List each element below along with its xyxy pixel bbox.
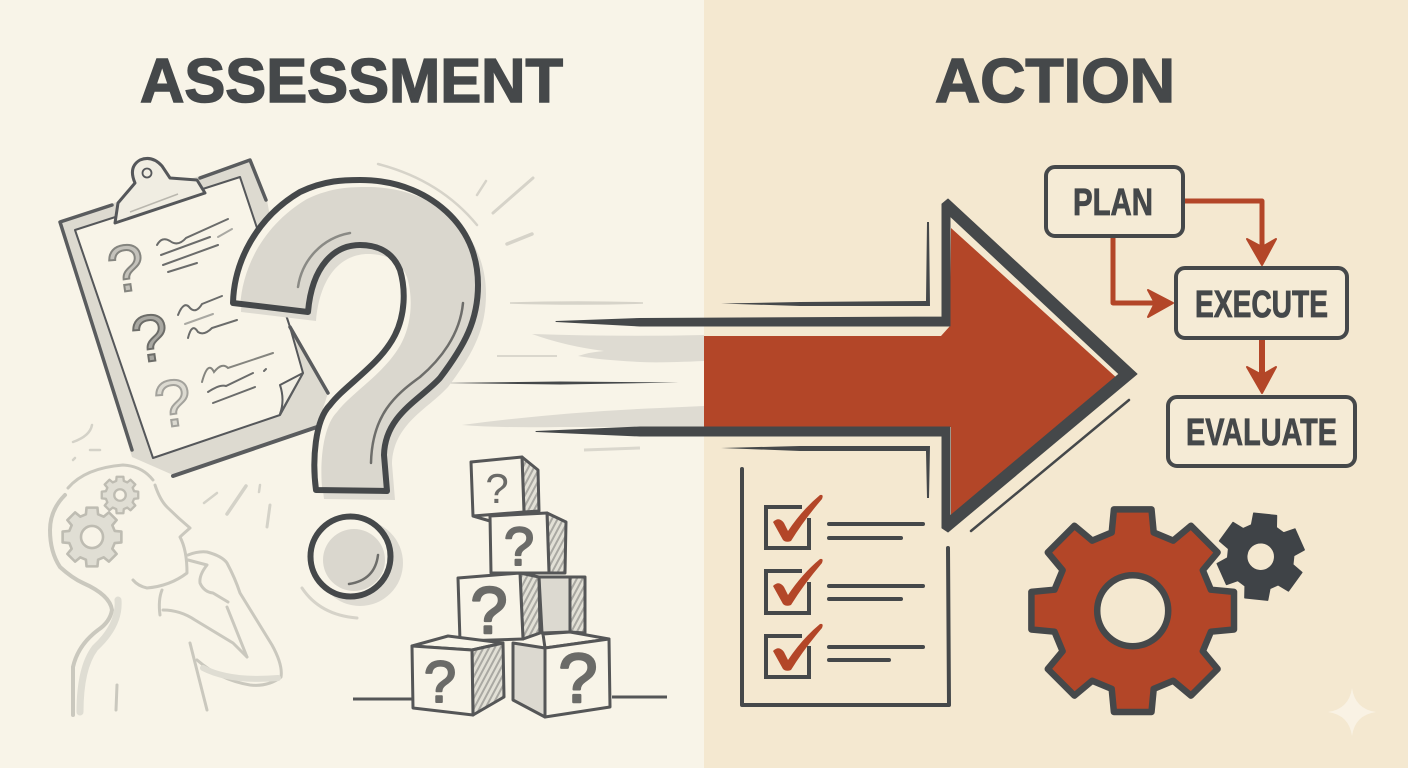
block third row <box>458 573 540 647</box>
sparks around head <box>73 425 270 527</box>
box: evaluate <box>1168 397 1355 466</box>
sparkle strokes at question mark <box>378 164 533 244</box>
illustration: large question mark <box>233 164 533 618</box>
question mark inner highlights <box>298 233 463 463</box>
illustration: stack of question blocks <box>353 457 667 717</box>
box: plan <box>1046 167 1183 236</box>
block bottom left: ? <box>424 650 456 715</box>
gear in head large <box>63 508 121 566</box>
block top <box>471 457 539 521</box>
block bottom left <box>412 636 504 715</box>
arrow: upper accent line <box>721 222 930 306</box>
illustration: thinking person with gears <box>50 425 281 715</box>
arrow: diagonal accent line <box>971 400 1129 531</box>
connector: plan to execute left <box>1113 237 1173 317</box>
arrow: lower accent line <box>721 446 930 498</box>
block bottom right <box>513 632 610 717</box>
heading: assessment: ASSESSMENT <box>140 47 563 116</box>
box: plan: PLAN <box>1073 182 1153 224</box>
block third row: ? <box>471 573 507 647</box>
block bottom right: ? <box>559 639 597 717</box>
clipboard clip <box>115 158 205 223</box>
illustration: clipboard with questions <box>60 158 328 476</box>
gear in head small <box>102 477 138 513</box>
panel: action background <box>704 0 1408 768</box>
icon: large red gear <box>1031 509 1234 712</box>
question mark dot <box>302 516 403 618</box>
checklist row 3 <box>766 624 923 677</box>
motion streaks behind the arrow <box>442 302 704 450</box>
box: evaluate: EVALUATE <box>1186 412 1337 454</box>
icon: small dark gear <box>1214 510 1307 603</box>
checklist row 1 <box>766 495 923 548</box>
flowchart: plan execute evaluate <box>1046 167 1355 466</box>
block second row <box>490 513 566 577</box>
ground lines <box>353 697 667 699</box>
panel: assessment background <box>0 0 704 768</box>
box: execute: EXECUTE <box>1195 284 1328 326</box>
heading: action: ACTION <box>935 47 1175 116</box>
clipboard question marks: ? <box>103 229 149 307</box>
clipboard question marks <box>103 229 196 442</box>
clipboard board <box>60 160 328 475</box>
question mark shading <box>240 187 485 498</box>
checklist row 2 <box>766 559 923 613</box>
connector: execute to evaluate <box>1247 338 1276 393</box>
question mark body <box>233 180 478 491</box>
clipboard question marks: ? <box>127 299 173 377</box>
arrow: red fill <box>704 228 1119 518</box>
person outline <box>50 465 281 715</box>
question mark shadow <box>241 189 486 500</box>
arrow: dark outline <box>536 199 1137 532</box>
clipboard outer edges <box>60 160 328 476</box>
box: execute <box>1176 268 1347 338</box>
clipboard question marks: ? <box>150 364 196 442</box>
clipboard paper <box>75 177 303 458</box>
checklist <box>742 469 949 705</box>
arrow from assessment to action <box>536 199 1137 532</box>
question mark outline <box>233 180 478 491</box>
icon: sparkle watermark <box>1328 688 1376 736</box>
connector: plan to execute right <box>1183 201 1276 265</box>
checklist page outline <box>742 469 949 705</box>
block rear <box>539 577 585 633</box>
clipboard scribbled text lines <box>157 219 273 403</box>
block top: ? <box>485 465 509 512</box>
block second row: ? <box>504 517 534 577</box>
